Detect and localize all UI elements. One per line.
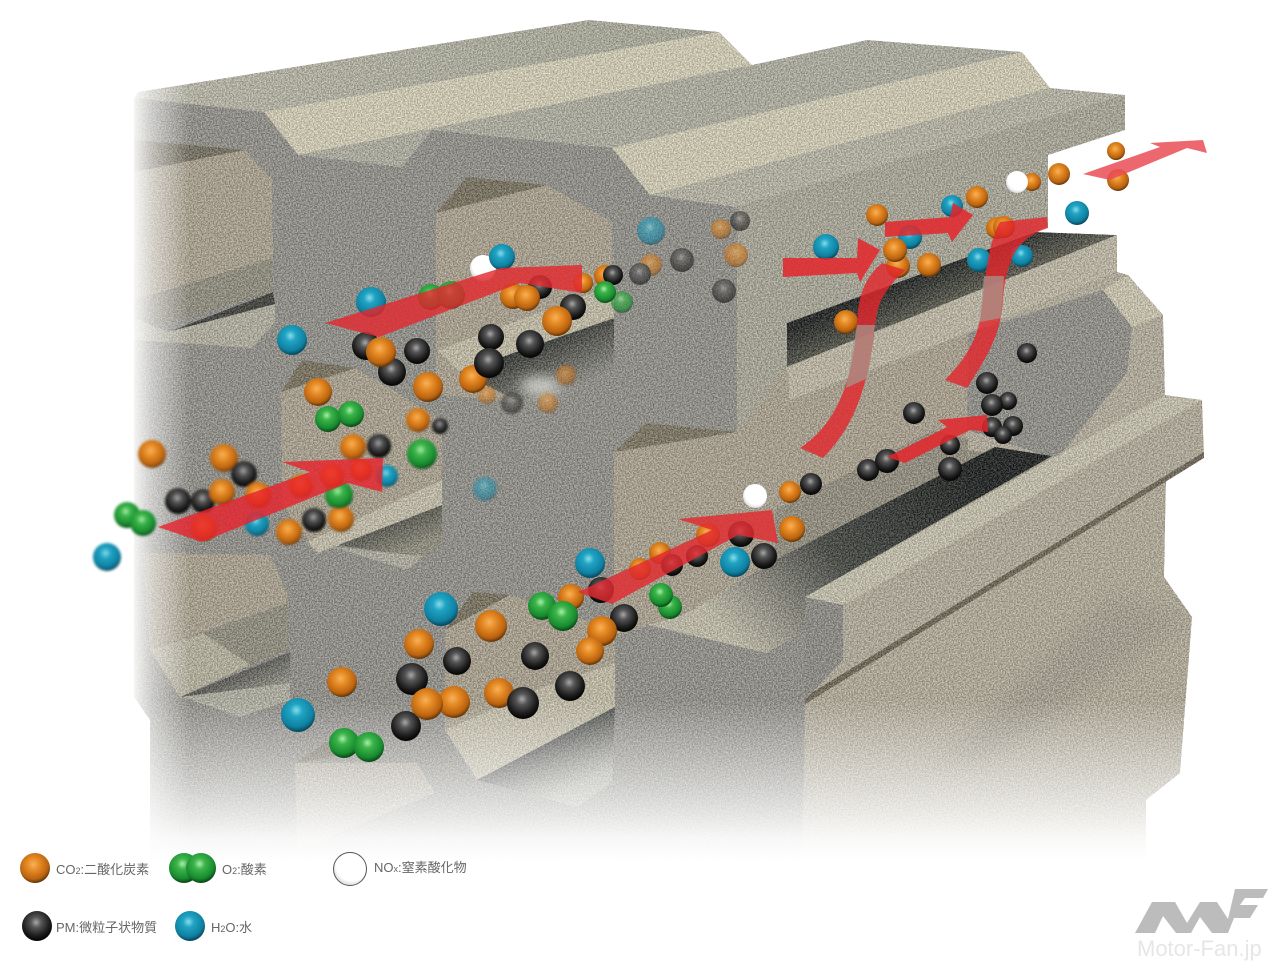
particles: lower cell — [281, 473, 822, 762]
long block upper face — [805, 400, 1204, 700]
legend: PM: PM:微粒子状物質 — [56, 920, 157, 935]
wall darker band — [775, 430, 995, 560]
arrow: curved through wall left — [800, 263, 905, 458]
logo: Motor-Fan: Motor-Fan.jp — [1137, 936, 1262, 961]
arrow: to outlet — [885, 203, 973, 242]
right upper face — [737, 95, 1125, 432]
arrow: curved through wall right — [945, 217, 1048, 388]
main end face of filter — [134, 98, 808, 860]
second block top surface — [298, 40, 1022, 167]
long block lower face — [802, 477, 1192, 860]
legend: H2O — [175, 911, 252, 941]
wall top shadow — [614, 423, 737, 452]
upper shelf top surface — [650, 88, 1125, 208]
long block end — [805, 597, 843, 700]
bottom cell — [295, 740, 435, 850]
lower channel stripe and ledge — [648, 447, 1052, 653]
particles: middle cell — [277, 244, 633, 432]
long block groove — [805, 452, 1204, 704]
arrow section hidden in wall left — [846, 325, 875, 388]
fuzzy smoke in channel — [520, 377, 560, 395]
chamber chamfer — [1103, 275, 1163, 327]
particles: ghosted in upper wall — [629, 211, 750, 303]
arrow: exiting gas — [1083, 140, 1207, 180]
upper slab — [787, 235, 1117, 400]
arrow: upper channel — [325, 265, 582, 337]
rear block top surface — [134, 20, 719, 112]
arrow: soot to chamber — [887, 415, 988, 463]
particles: fading through wall — [473, 365, 576, 501]
right chamber — [967, 290, 1132, 457]
legend: O2: O2:酸素 — [222, 862, 267, 877]
legend: CO2 — [20, 853, 149, 883]
honeycomb filter structure — [134, 20, 1204, 860]
legend: H2O: H2O:水 — [211, 920, 252, 935]
lower centre cell — [445, 592, 615, 807]
legend: O2 — [169, 853, 267, 883]
legend — [20, 852, 467, 941]
legend: NOx: NOx:窒素酸化物 — [374, 860, 467, 875]
left fade — [0, 80, 190, 880]
chamber backing — [968, 272, 1165, 462]
long block shaded band — [930, 595, 1192, 770]
second block chamfer — [612, 52, 1050, 195]
legend: NOx — [334, 852, 467, 886]
legend: CO2: CO2:二酸化炭素 — [56, 862, 149, 877]
particles: soot collecting in chamber — [857, 343, 1037, 481]
upper centre cell — [436, 177, 614, 440]
particles: upper right outlet — [813, 142, 1129, 334]
arrow section hidden in wall right — [980, 276, 1004, 322]
bottom fade — [0, 700, 1279, 862]
upper slot — [787, 232, 1117, 367]
long block top — [805, 395, 1202, 605]
tan channel wall — [614, 272, 1117, 638]
particles: blurred entering left — [93, 408, 448, 571]
rear block chamfer — [264, 32, 752, 155]
arrow: into upper chamber — [783, 238, 880, 282]
lower far-left cell — [143, 553, 290, 717]
arrow: gas entering — [158, 458, 383, 542]
arrow: lower channel — [578, 510, 778, 604]
upper left cell — [134, 140, 275, 348]
middle left cell — [281, 360, 442, 570]
logo: Motor-Fan — [1135, 889, 1268, 961]
legend: PM — [22, 911, 157, 941]
